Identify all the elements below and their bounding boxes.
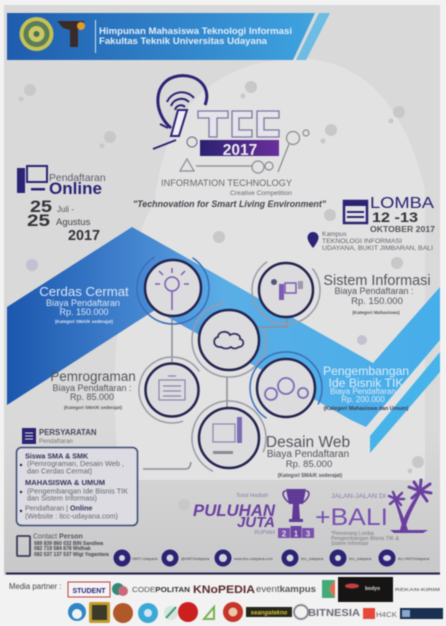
- text: Cerdas Cermat: Rp. 150.000: [59, 307, 109, 317]
- text: Desain Web: Desain Web: [266, 434, 350, 451]
- text: Pengembangan Ide Bisnik TIK: Rp. 200.000: [341, 395, 385, 404]
- icon: palm trees: [389, 480, 431, 533]
- prize: trip to Bali: Sistem Informasi: [331, 541, 368, 547]
- prize: trip to Bali: +BALI: [315, 504, 388, 531]
- icon: HMTI logo: [57, 21, 85, 47]
- text: Desain Web: (Kategori SMA/K sederajat): [278, 473, 343, 479]
- icon: computer: [17, 166, 47, 193]
- online registration block: Pendaftaran: [49, 173, 106, 184]
- online registration block: Agustus: [56, 217, 91, 228]
- ITCC logo: [153, 76, 309, 173]
- text: Cerdas Cermat: Cerdas Cermat: [39, 284, 129, 299]
- icon: calendar: [344, 200, 367, 223]
- text: Pengembangan Ide Bisnik TIK: Ide Bisnik TIK: [329, 376, 403, 390]
- requirements box: (Website : itcc-udayana.com): [25, 512, 118, 520]
- competition date block: UDAYANA, BUKIT JIMBARAN, BALI: [322, 245, 433, 252]
- prize: trip to Bali: [315, 480, 431, 547]
- competition date block: LOMBA: [370, 195, 434, 212]
- decorative dots: [18, 81, 424, 511]
- icon: trophy: 2: [282, 530, 287, 538]
- circle: cloud: [192, 303, 266, 377]
- online registration block: 2017: [68, 228, 100, 244]
- requirements heading: [22, 428, 97, 445]
- connector lines: [143, 318, 287, 469]
- online registration block: Online: [49, 180, 102, 198]
- circle: Desain Web: [178, 387, 280, 489]
- online registration block: 25: [27, 211, 50, 230]
- icon: trophy: 3: [306, 530, 311, 538]
- media partners row 1: KNoPEDIA: [193, 584, 255, 596]
- text: Cerdas Cermat: Biaya Pendaftaran: [46, 298, 120, 308]
- requirements box: [16, 448, 138, 526]
- divider: [6, 572, 440, 574]
- social media row: www.itcc-udayana.com: [234, 557, 273, 561]
- prize: trip to Bali: Pengembangan Bisnis TIK &: [331, 536, 400, 542]
- requirements box: MAHASISWA & UMUM: [25, 478, 105, 487]
- header title: Himpunan Mahasiswa Teknologi Informasi: [99, 26, 292, 36]
- text: Pemrograman: [50, 369, 136, 410]
- requirements heading: Pendaftaran: [39, 438, 73, 445]
- media partners row 1: CODEPOLITAN: [132, 585, 190, 594]
- contact person: [17, 534, 109, 558]
- prize: trip to Bali: *Pemenang Lomba: [331, 531, 374, 537]
- competition date block: Kampus: [322, 231, 347, 238]
- header title: [99, 26, 292, 46]
- event name: INFORMATION TECHNOLOGY: [161, 178, 292, 188]
- requirements box: Siswa SMA & SMK: [25, 452, 89, 460]
- media partners row 1: STUDENT: [72, 588, 106, 595]
- icon: trophy: 1: [294, 530, 299, 538]
- text: Desain Web: Biaya Pendaftaran: [267, 449, 349, 460]
- social media row: itcc_udayana: [349, 557, 372, 561]
- header banner: [7, 13, 330, 60]
- year bar: [200, 140, 279, 159]
- social media row: itcc HMTIUdayana: [398, 557, 430, 561]
- requirements box: (Pemrograman, Desain Web ,: [27, 459, 124, 468]
- online registration block: 25: [30, 197, 52, 216]
- online registration block: [17, 166, 106, 244]
- media partners row 2: seangatekno: [251, 610, 288, 616]
- prize: Puluhan Juta: RUPIAH: [254, 530, 275, 536]
- text: Sistem Informasi: (Kategori Mahasiswa): [352, 310, 400, 315]
- prize: Puluhan Juta: PULUHAN: [193, 501, 276, 520]
- text: Pengembangan Ide Bisnik TIK: Pengembangan: [323, 364, 409, 378]
- text: Pemrograman: (Kategori SMA/K sederajat): [64, 405, 123, 410]
- requirements heading: PERSYARATAN: [39, 428, 97, 437]
- online registration block: Juli -: [57, 205, 74, 214]
- prize: Puluhan Juta: Total Hadiah: [236, 493, 268, 499]
- social media row: itcc_udayana: [301, 557, 324, 561]
- text: Sistem Informasi: Biaya Pendaftaran :: [334, 286, 414, 296]
- tagline: "Technovation for Smart Living Environment": [133, 199, 327, 209]
- contact person: 082 719 584 678 Widhak: [34, 546, 91, 552]
- prize: Puluhan Juta: JUTA: [237, 514, 275, 531]
- text: Cerdas Cermat: [39, 284, 129, 324]
- circle: Ide Bisnik: [250, 352, 322, 424]
- contact person: 089 839 860 032 BIN Sandiwa: [34, 541, 103, 547]
- text: Sistem Informasi: Rp. 150.000: [351, 296, 403, 307]
- media partners row 1: Media partner :: [9, 582, 61, 591]
- text: Pemrograman: Biaya Pendaftaran :: [52, 383, 132, 393]
- text: Sistem Informasi: Sistem Informasi: [323, 273, 431, 289]
- requirements box: dan Cerdas Cermat): [27, 466, 92, 476]
- text: Pemrograman: Pemrograman: [50, 369, 136, 384]
- media partners row 1: bodyo: [365, 586, 380, 592]
- prize: trip to Bali: JALAN-JALAN DI: [331, 494, 386, 500]
- header title: Fakultas Teknik Universitas Udayana: [99, 36, 268, 46]
- social media row: [114, 550, 430, 566]
- competition date block: OKTOBER 2017: [370, 224, 435, 234]
- circle: Cerdas Cermat: [137, 252, 209, 324]
- text: Pengembangan Ide Bisnik TIK: [323, 364, 409, 412]
- text: Cerdas Cermat: (Kategori SMA/K sederajat): [55, 319, 114, 324]
- social media row: @HMTIUdayana: [181, 557, 210, 561]
- prize: Puluhan Juta: [193, 493, 276, 536]
- icon: location pin: [308, 232, 318, 248]
- requirements box: Pendaftaran | Online: [25, 504, 92, 512]
- event name: Creative Competition: [230, 190, 292, 197]
- competition date block: TEKNOLOGI INFORMASI: [322, 238, 402, 245]
- text: Desain Web: Rp. 85.000: [286, 459, 332, 470]
- media partners row 1: eventkampus: [256, 584, 316, 595]
- media partners row 2: [68, 602, 443, 623]
- text: Pengembangan Ide Bisnik TIK: Biaya Pendaftaran: [330, 387, 396, 396]
- year bar: 2017: [223, 142, 257, 159]
- text: Pemrograman: Rp. 85.000: [70, 392, 114, 402]
- media partners row 2: H4CK: [376, 610, 397, 619]
- zigzag band: [7, 227, 440, 453]
- icon: trophy: [278, 489, 314, 538]
- contact person: 082 537 137 537 Wigi Yogantara: [34, 552, 109, 558]
- requirements box: (Pengembangan Ide Bisnis TIK: [27, 486, 128, 496]
- icon: university logo: [20, 17, 54, 51]
- event name: [161, 178, 292, 197]
- media partners row 1: REKAN-KIRIM: [395, 587, 440, 592]
- circle: Pemrograman: [134, 352, 210, 428]
- media partners row 1: [9, 577, 440, 602]
- text: Sistem Informasi: [323, 273, 431, 315]
- competition date block: 12 -13: [372, 209, 418, 225]
- requirements box: dan Sistem Informasi): [27, 494, 97, 502]
- social media row: HMTI Udayana: [132, 557, 158, 561]
- contact person: Contact Person: [33, 534, 83, 540]
- circle: Sistem Informasi: [252, 256, 320, 324]
- competition date block: [308, 195, 435, 252]
- media partners row 2: BITNESIA: [308, 608, 360, 619]
- text: Pengembangan Ide Bisnik TIK: (Kategori Mahasiswa dan Umum): [324, 406, 409, 412]
- text: Desain Web: [266, 434, 350, 479]
